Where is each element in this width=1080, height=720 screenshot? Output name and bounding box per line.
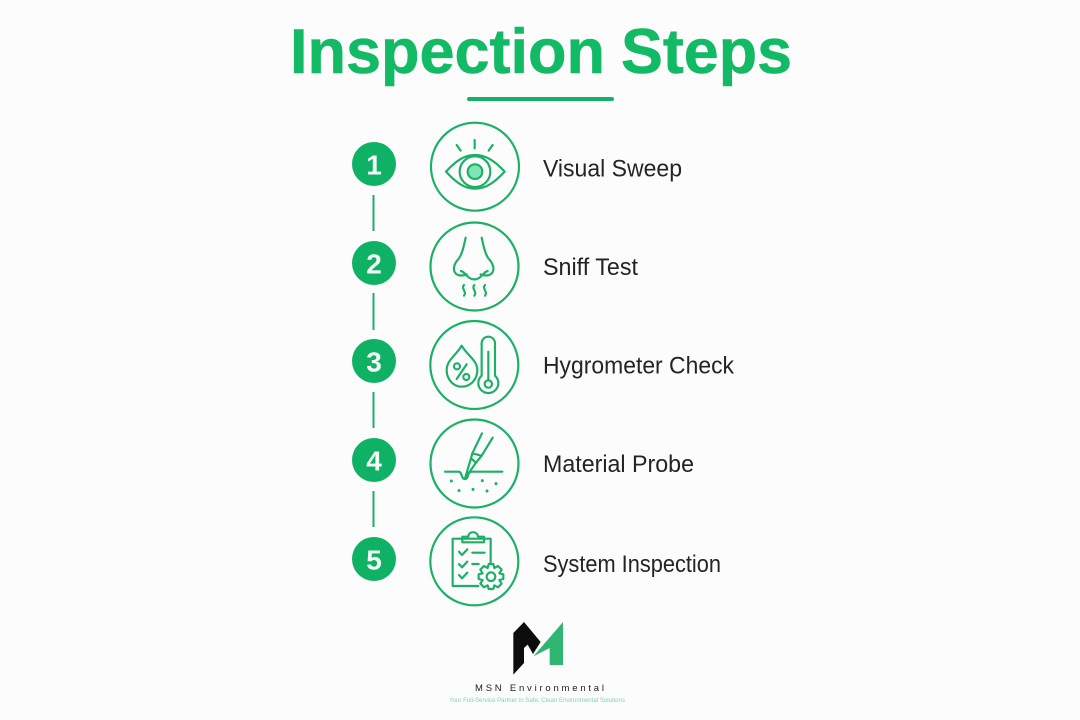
number badge 4: 4 <box>366 446 382 476</box>
step 4: material probe <box>352 420 694 508</box>
tagline: Your Full-Service Partner in Safe, Clean Environmental Solutions <box>449 697 625 704</box>
number badge 1: 1 <box>366 150 382 180</box>
title <box>290 17 792 87</box>
label: material probe: Material Probe <box>543 451 694 478</box>
title underline <box>467 97 614 101</box>
label: sniff test: Sniff Test <box>543 254 638 281</box>
title: Steps <box>621 17 792 87</box>
step 2: sniff test <box>352 222 638 310</box>
number badge 4 <box>352 438 396 482</box>
icon: eye <box>431 123 519 211</box>
icon: clipboard and gear <box>430 517 518 605</box>
icon: humidity drop and thermometer <box>430 321 518 409</box>
title: Inspection <box>290 17 605 87</box>
logo: MSN Environmental <box>449 622 625 704</box>
number badge 3: 3 <box>366 346 382 378</box>
number badge 2: 2 <box>366 248 382 280</box>
number badge 1 <box>352 142 396 186</box>
step 5: system inspection <box>352 517 721 605</box>
step 1: visual sweep <box>352 123 682 211</box>
number badge 3 <box>352 339 396 383</box>
number badge 5 <box>352 537 396 581</box>
label: hygrometer check: Hygrometer Check <box>543 352 735 380</box>
icon: nose <box>430 222 518 310</box>
number badge 5: 5 <box>366 544 382 576</box>
connector lines <box>372 195 374 527</box>
number badge 2 <box>352 241 396 285</box>
step 3: hygrometer check <box>352 321 735 409</box>
label: system inspection: System Inspection <box>543 551 721 578</box>
company name: MSN Environmental <box>475 683 604 694</box>
logo mark <box>513 622 563 675</box>
icon: probe in material <box>430 420 518 508</box>
label: visual sweep: Visual Sweep <box>543 156 682 182</box>
